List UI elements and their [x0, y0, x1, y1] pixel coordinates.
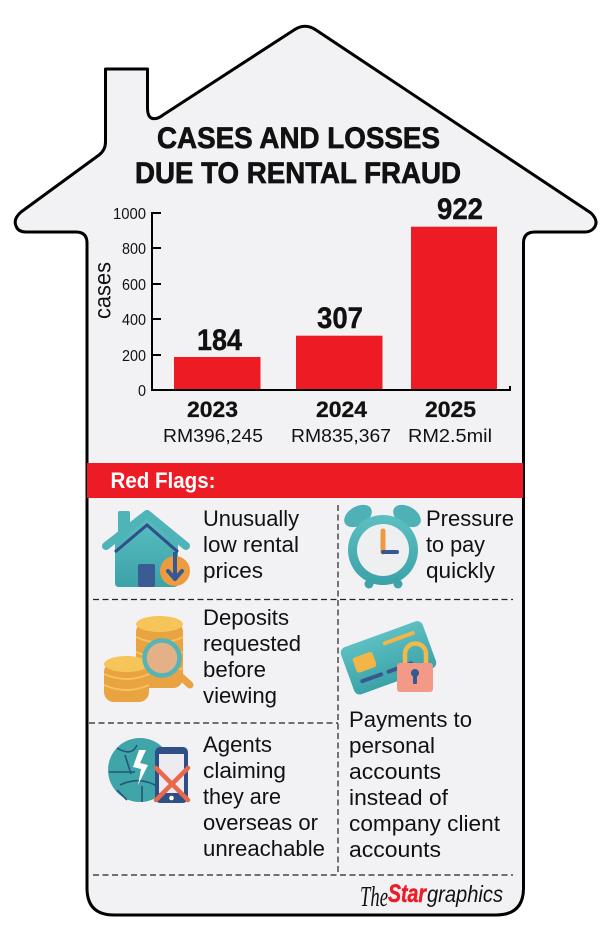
loss amounts [163, 425, 492, 446]
title: DUE TO RENTAL FRAUD [135, 157, 461, 190]
text: pressure to pay quickly [426, 506, 514, 583]
y axis numbers: 400 [122, 312, 146, 329]
y axis numbers: 600 [122, 277, 146, 294]
value labels [197, 193, 483, 357]
loss amounts: RM2.5mil [408, 425, 492, 446]
text: unusually low rental prices: prices [203, 558, 263, 583]
red flags banner [87, 463, 523, 498]
icon: house with down arrow [106, 511, 190, 587]
text: agents claiming overseas or unreachable [203, 732, 325, 861]
icon: coins with magnifier [104, 616, 190, 702]
year labels: 2024 [316, 397, 368, 422]
loss amounts: RM835,367 [291, 425, 391, 446]
text: payments to personal accounts [349, 707, 500, 862]
y axis numbers: 1000 [113, 206, 146, 223]
text: unusually low rental prices: Unusually [203, 506, 299, 531]
credit logo: The Star graphics: graphics [427, 881, 503, 907]
bar chart: cases per year [90, 193, 510, 446]
text: unusually low rental prices [203, 506, 299, 583]
year labels: 2025 [425, 397, 476, 422]
text: payments to personal accounts: instead of [349, 785, 449, 810]
title [135, 122, 461, 190]
y axis label: cases [90, 262, 116, 319]
value labels: 922 [437, 193, 483, 226]
text: agents claiming overseas or unreachable: they are [203, 784, 281, 809]
text: payments to personal accounts: Payments to [349, 707, 472, 732]
text: unusually low rental prices: low rental [203, 532, 299, 557]
y axis numbers [113, 206, 146, 400]
text: payments to personal accounts: accounts [349, 837, 441, 862]
credit logo: The Star graphics: Star [388, 880, 427, 908]
y axis numbers: 800 [122, 241, 146, 258]
y axis numbers: 200 [122, 348, 146, 365]
y axis numbers: 0 [138, 383, 146, 400]
icon: alarm clock [340, 500, 425, 588]
year labels [187, 397, 476, 422]
text: deposits requested before viewing: Deposits [203, 605, 289, 630]
axes [152, 213, 510, 390]
text: payments to personal accounts: accounts [349, 759, 441, 784]
text: agents claiming overseas or unreachable: overseas or [203, 810, 318, 835]
title: CASES AND LOSSES [157, 122, 440, 155]
value labels: 307 [317, 302, 363, 335]
text: deposits requested before viewing: viewing [203, 683, 277, 708]
text: deposits requested before viewing: requested [203, 631, 301, 656]
text: agents claiming overseas or unreachable: claiming [203, 758, 286, 783]
text: deposits requested before viewing [203, 605, 301, 708]
text: pressure to pay quickly: Pressure [426, 506, 514, 531]
text: agents claiming overseas or unreachable: unreachable [203, 836, 325, 861]
credit logo: The Star graphics: The [360, 881, 388, 913]
value labels: 184 [197, 324, 242, 357]
bars [174, 227, 497, 390]
text: pressure to pay quickly: to pay [426, 532, 485, 557]
red flags banner: Red Flags: [110, 468, 216, 493]
text: deposits requested before viewing: before [203, 657, 266, 682]
text: payments to personal accounts: company client [349, 811, 500, 836]
text: pressure to pay quickly: quickly [426, 558, 495, 583]
text: payments to personal accounts: personal [349, 733, 435, 758]
icon: globe and crossed-out phone [108, 738, 188, 803]
icon: bank card with padlock [339, 619, 438, 696]
text: agents claiming overseas or unreachable: Agents [203, 732, 272, 757]
credit logo: The Star graphics [360, 880, 503, 913]
year labels: 2023 [187, 397, 238, 422]
loss amounts: RM396,245 [163, 425, 263, 446]
